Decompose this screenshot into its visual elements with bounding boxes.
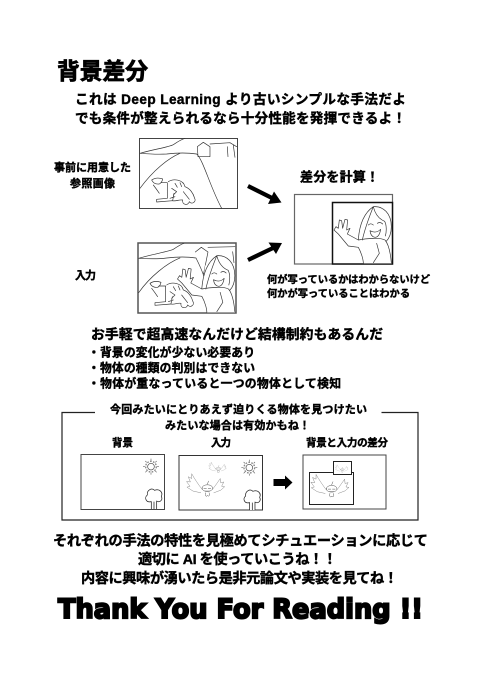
thank you banner: Thank You For Reading !! <box>58 594 423 625</box>
example labels: 入力 <box>211 436 231 449</box>
closing text: 適切に AI を使っていこうね！！ <box>138 551 337 568</box>
example caption: みたいな場合は有効かもね！ <box>165 418 310 432</box>
example caption: 今回みたいにとりあえず迫りくる物体を見つけたい <box>110 402 367 416</box>
closing text: それぞれの手法の特性を見極めてシチュエーションに応じて <box>53 532 428 550</box>
example caption <box>110 402 367 432</box>
arrow: example <box>274 476 292 490</box>
example: difference <box>303 455 386 509</box>
example: background <box>81 454 164 510</box>
heading: compute difference: 差分を計算！ <box>300 170 379 184</box>
example: input <box>179 456 262 510</box>
person <box>177 256 235 312</box>
panel: example box <box>62 402 418 520</box>
intro text <box>75 91 406 126</box>
arrow: input to difference <box>248 242 282 260</box>
label: input: 入力 <box>75 268 96 282</box>
detected region <box>332 202 392 264</box>
caption: difference: 何が写っているかはわからないけど <box>267 273 431 286</box>
closing text <box>53 532 428 587</box>
arrow: reference to difference <box>248 186 282 204</box>
example labels <box>112 436 388 449</box>
panel: input image <box>138 243 236 313</box>
subheading: constraints: お手軽で超高速なんだけど結構制約もあるんだ <box>91 326 383 342</box>
panel: difference result <box>294 194 392 264</box>
list: constraints <box>88 346 341 390</box>
closing text: 内容に興味が湧いたら是非元論文や実装を見てね！ <box>81 570 398 587</box>
intro text: これは Deep Learning より古いシンプルな手法だよ <box>75 91 406 107</box>
caption: difference: 何かが写っていることはわかる <box>267 287 410 300</box>
panel: reference background image <box>140 138 238 208</box>
list: constraints: ・物体の種類の判別はできない <box>88 361 255 375</box>
list: constraints: ・物体が重なっていると一つの物体として検知 <box>88 376 341 390</box>
label: reference image: 事前に用意した <box>54 160 131 174</box>
label: reference image: 参照画像 <box>70 176 115 190</box>
example labels: 背景と入力の差分 <box>306 436 388 449</box>
title: 背景差分 <box>57 58 148 84</box>
scene lines <box>140 138 237 208</box>
scene lines <box>139 243 235 308</box>
example labels: 背景 <box>112 436 133 449</box>
list: constraints: ・背景の変化が少ない必要あり <box>88 346 255 360</box>
label: reference image <box>54 160 131 190</box>
caption: difference <box>267 273 431 300</box>
intro text: でも条件が整えられるなら十分性能を発揮できるよ！ <box>75 110 406 126</box>
